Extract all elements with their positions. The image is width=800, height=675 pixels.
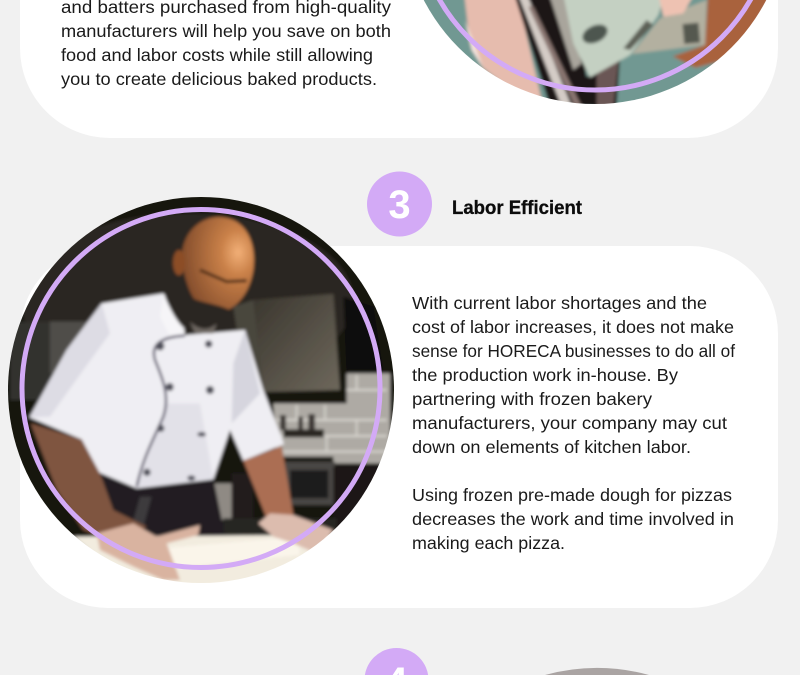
- range hood: [253, 294, 340, 392]
- dollar bills: [562, 0, 667, 77]
- photo: chef rolling dough: [0, 190, 400, 590]
- text block: step 3 first paragraph: [412, 293, 735, 457]
- tiled wall: [273, 373, 390, 463]
- fingers and right hand: [657, 0, 698, 17]
- text block: step 2 body: food and labor costs while still allowing: [61, 45, 373, 65]
- head: [182, 217, 254, 315]
- jacket collar: [160, 293, 185, 337]
- text block: step 3 first paragraph: the production work in-house. By: [412, 365, 678, 385]
- text block: step 3 first paragraph: manufacturers, your company may cut: [412, 413, 727, 433]
- right forearm: [243, 446, 293, 518]
- right hand: [258, 513, 333, 553]
- left hand: [97, 523, 200, 580]
- text block: step 3 first paragraph: partnering with frozen bakery: [412, 389, 652, 409]
- icon: number badge 3: 3: [388, 183, 411, 227]
- dough and rolling pin: [73, 535, 333, 590]
- ring: photo outline: [416, 0, 774, 90]
- text block: step 3 first paragraph: With current labor shortages and the: [412, 293, 707, 313]
- panel: step 2 card: [20, 0, 800, 138]
- text block: step 3 second paragraph: [412, 485, 734, 553]
- text block: step 3 second paragraph: decreases the work and time involved in: [412, 509, 734, 529]
- beard: [164, 295, 230, 329]
- left hand: [463, 0, 542, 100]
- chef jacket: [29, 293, 284, 488]
- ring: photo outline: [22, 210, 380, 568]
- left forearm: [31, 423, 147, 543]
- text block: step 2 body: manufacturers will help you save on both: [61, 21, 391, 41]
- shelf and appliances: [283, 429, 324, 437]
- jacket buttons: [143, 340, 214, 481]
- text block: step 3 first paragraph: sense for HORECA businesses to do all of: [412, 341, 735, 361]
- heading: Labor Efficient: Labor Efficient: [452, 198, 583, 219]
- panel: step 3 card: [20, 246, 778, 608]
- text block: step 2 body: you to create delicious baked products.: [61, 69, 377, 89]
- text block: step 3 second paragraph: making each pizza.: [412, 533, 565, 553]
- photo: step 4 circle top edge: [545, 668, 649, 675]
- apron: [102, 478, 224, 534]
- icon: number badge 3: [367, 172, 432, 236]
- text block: step 3 first paragraph: down on elements of kitchen labor.: [412, 437, 691, 457]
- text block: step 2 body: [61, 0, 391, 89]
- photo: hands holding a wallet of dollar bills: [424, 0, 766, 104]
- text block: step 3 second paragraph: Using frozen pre-made dough for pizzas: [412, 485, 732, 505]
- icon: number badge 4: [364, 648, 428, 675]
- text block: step 3 first paragraph: cost of labor increases, it does not make: [412, 317, 734, 337]
- jacket piping: [137, 336, 185, 487]
- kitchen wall: [22, 212, 354, 338]
- wallet: [512, 0, 620, 107]
